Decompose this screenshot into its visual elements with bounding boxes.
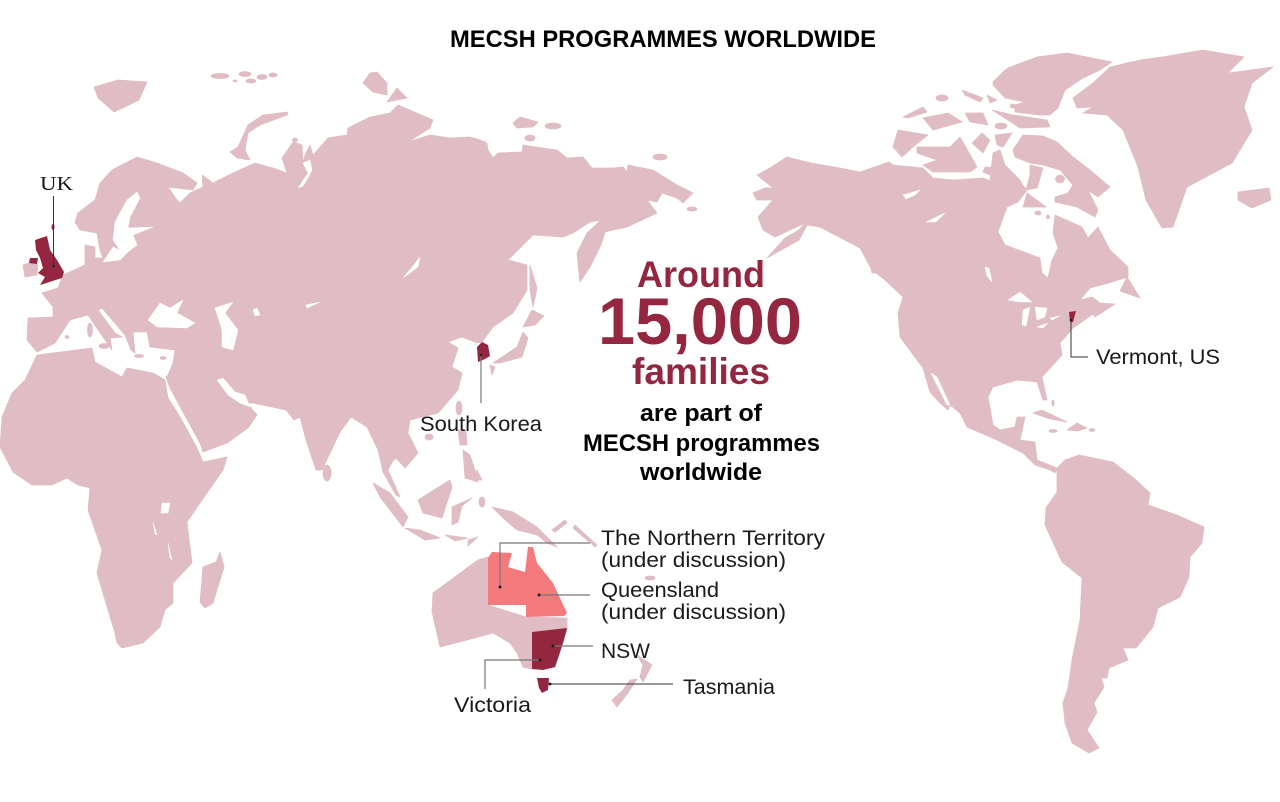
highlight: NSW and Victoria bbox=[532, 628, 567, 670]
leader: Vermont bbox=[1070, 319, 1088, 357]
landmass: South-East Asia and Pacific islands bbox=[373, 470, 655, 580]
landmass: Canadian Arctic islands bbox=[893, 53, 1112, 219]
highlight: UK bbox=[29, 224, 64, 285]
leader: Northern Territory bbox=[498, 543, 590, 588]
landmass: Eurasia bbox=[27, 105, 693, 497]
landmass: South America bbox=[1045, 455, 1204, 753]
callout line: are part of: are part of bbox=[640, 400, 763, 427]
leader: Tasmania bbox=[548, 682, 673, 686]
callout line: families: families bbox=[632, 351, 770, 392]
landmass: Mediterranean and Caribbean islands bbox=[65, 263, 1095, 432]
landmass: New Zealand bbox=[612, 655, 652, 707]
landmass: Greenland and Iceland bbox=[1073, 50, 1273, 228]
leader: NSW bbox=[552, 644, 593, 648]
leader: UK bbox=[52, 196, 55, 267]
leader: Victoria bbox=[485, 658, 542, 689]
label: South Korea: South Korea bbox=[420, 413, 542, 436]
highlight: Northern Territory and Queensland bbox=[488, 547, 567, 617]
highlight: Tasmania bbox=[537, 678, 549, 693]
leader: Queensland bbox=[538, 594, 590, 596]
landmass: Africa bbox=[0, 348, 227, 648]
label: NSW: NSW bbox=[601, 640, 650, 663]
leader: South Korea bbox=[480, 354, 482, 403]
callout line: MECSH programmes: MECSH programmes bbox=[583, 430, 820, 457]
landmass: East Asian islands bbox=[323, 265, 544, 482]
highlight: South Korea bbox=[477, 342, 490, 362]
label: under discussion 1: (under discussion) bbox=[601, 549, 786, 572]
title: MECSH PROGRAMMES WORLDWIDE bbox=[450, 26, 876, 53]
highlight: Vermont bbox=[1069, 311, 1076, 322]
label: Vermont, US: Vermont, US bbox=[1096, 346, 1220, 369]
label: Victoria: Victoria bbox=[454, 694, 531, 717]
label: Queensland: Queensland bbox=[601, 579, 719, 602]
landmass: Madagascar bbox=[200, 552, 224, 608]
landmass: Ireland bbox=[23, 262, 38, 277]
label: under discussion 2: (under discussion) bbox=[601, 601, 786, 624]
label: Tasmania: Tasmania bbox=[683, 676, 775, 699]
landmass: Arctic Russia islands bbox=[94, 72, 697, 211]
landmass: Australia base bbox=[432, 557, 567, 669]
callout: 15,000 families bbox=[583, 254, 820, 486]
landmass: North America bbox=[753, 157, 1140, 473]
label: UK: UK bbox=[40, 173, 74, 195]
callout line: worldwide: worldwide bbox=[639, 459, 762, 486]
seas and lakes bbox=[103, 160, 1060, 560]
callout number: 15,000: 15,000 bbox=[598, 284, 802, 358]
callout line: Around: Around bbox=[637, 254, 765, 295]
label: The Northern Territory: The Northern Territory bbox=[601, 527, 826, 550]
